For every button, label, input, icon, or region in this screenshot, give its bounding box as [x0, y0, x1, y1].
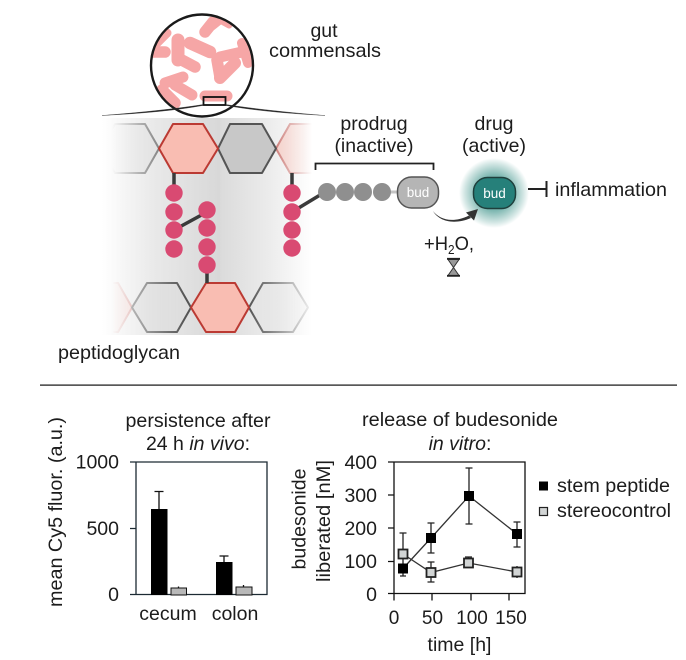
y axis label: liberated [nM]	[313, 460, 335, 582]
icon: zoom lines to cell wall	[102, 104, 325, 116]
top glycan row of hexagons	[115, 123, 310, 174]
label: plus water: 2	[448, 243, 455, 257]
axes frame	[130, 462, 267, 594]
divider	[40, 384, 677, 386]
label: plus water: O,	[455, 233, 474, 255]
chart title: in vitro:	[429, 433, 491, 455]
peptide linkers	[174, 173, 325, 283]
y tick labels: 0	[366, 584, 377, 606]
x axis label: time [h]	[428, 634, 491, 656]
chart: persistence bar chart	[45, 410, 271, 625]
y tick labels	[76, 452, 119, 606]
zoom window marker	[204, 97, 226, 105]
chart title: 24 h in vivo:	[146, 433, 250, 455]
error bars	[400, 468, 520, 582]
x tick labels: 150	[495, 608, 527, 629]
icon: hourglass	[447, 259, 460, 276]
x tick labels	[389, 608, 527, 629]
label: gut commensals: gut	[310, 20, 338, 42]
y tick labels: 300	[344, 485, 377, 507]
y tick labels: 200	[344, 518, 377, 540]
inhibition bar	[528, 181, 546, 197]
bottom glycan row of hexagons	[116, 282, 309, 333]
y tick labels: 1000	[76, 452, 119, 474]
bars	[151, 492, 252, 595]
y axis label: budesonide	[288, 468, 310, 570]
chart title	[362, 409, 558, 455]
y tick labels	[344, 452, 377, 606]
label: drug active: drug	[474, 113, 514, 135]
legend: stem peptide	[557, 475, 670, 497]
stem peptide beads	[165, 184, 301, 274]
chart: budesonide release line chart	[288, 409, 558, 656]
x tick labels: 50	[422, 608, 443, 629]
label: prodrug inactive	[334, 113, 414, 157]
label: inflammation: inflammation	[555, 179, 667, 201]
axes frame	[388, 462, 525, 600]
label: gut commensals	[269, 20, 381, 62]
chart title: persistence after	[126, 410, 271, 432]
icon: prodrug beads with budesonide: bud	[407, 185, 429, 200]
x labels	[139, 603, 258, 625]
legend	[539, 475, 671, 522]
gray cell wall background	[102, 118, 312, 335]
panel: peptidoglycan schematic	[114, 118, 320, 335]
legend: stereocontrol	[557, 500, 671, 522]
y tick labels: 0	[108, 584, 119, 606]
label: drug active	[462, 113, 526, 157]
icon: prodrug beads with budesonide	[318, 177, 438, 208]
icon: active budesonide with glow: bud	[483, 186, 506, 201]
label: drug active: (active)	[462, 135, 526, 157]
y axis label: mean Cy5 fluor. (a.u.)	[45, 417, 67, 607]
x tick labels: 0	[389, 608, 399, 629]
y tick labels: 500	[86, 518, 119, 540]
series: stem peptide	[398, 491, 522, 574]
label: plus water: +H	[424, 233, 449, 255]
icon: magnified gut bacteria	[150, 14, 253, 116]
y axis label	[288, 460, 335, 582]
series: stereocontrol	[398, 550, 522, 577]
x labels: colon	[212, 603, 258, 625]
bracket: prodrug	[316, 164, 434, 170]
y tick labels: 100	[344, 551, 377, 573]
label: prodrug inactive: prodrug	[340, 113, 408, 135]
chart title: release of budesonide	[362, 409, 558, 431]
x labels: cecum	[139, 603, 197, 625]
icon: active budesonide with glow	[459, 158, 529, 228]
arrow: hydrolysis	[433, 209, 478, 222]
x tick labels: 100	[456, 608, 488, 629]
y tick labels: 400	[344, 452, 377, 474]
label: gut commensals: commensals	[269, 40, 381, 62]
label: prodrug inactive: (inactive)	[334, 135, 414, 157]
chart title	[126, 410, 271, 455]
label: peptidoglycan: peptidoglycan	[58, 342, 180, 364]
